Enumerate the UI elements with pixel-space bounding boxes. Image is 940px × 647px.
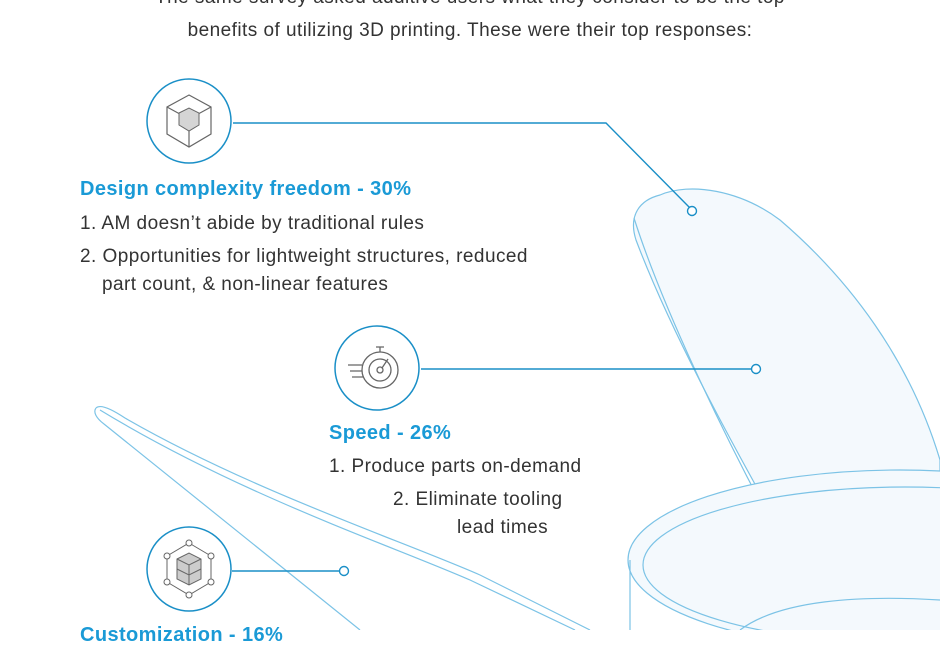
list: speed: lead times (457, 517, 548, 538)
list: speed (329, 456, 582, 538)
heading: speed: Speed - 26% (329, 422, 451, 444)
icon: cube (146, 78, 232, 164)
list: design complexity: 1. AM doesn’t abide by traditional rules (80, 213, 424, 234)
list: design complexity (80, 213, 528, 295)
heading: design complexity: Design complexity freedom - 30% (80, 178, 411, 200)
heading: customization: Customization - 16% (80, 624, 283, 646)
icon: customization (146, 526, 232, 612)
subtitle (155, 0, 785, 41)
icon: stopwatch (334, 325, 420, 411)
list: speed: 1. Produce parts on-demand (329, 456, 582, 477)
list: design complexity: 2. Opportunities for lightweight structures, reduced (80, 246, 528, 267)
subtitle: benefits of utilizing 3D printing. These were their top responses: (188, 20, 752, 41)
list: speed: 2. Eliminate tooling (393, 489, 563, 510)
list: design complexity: part count, & non-linear features (102, 274, 388, 295)
